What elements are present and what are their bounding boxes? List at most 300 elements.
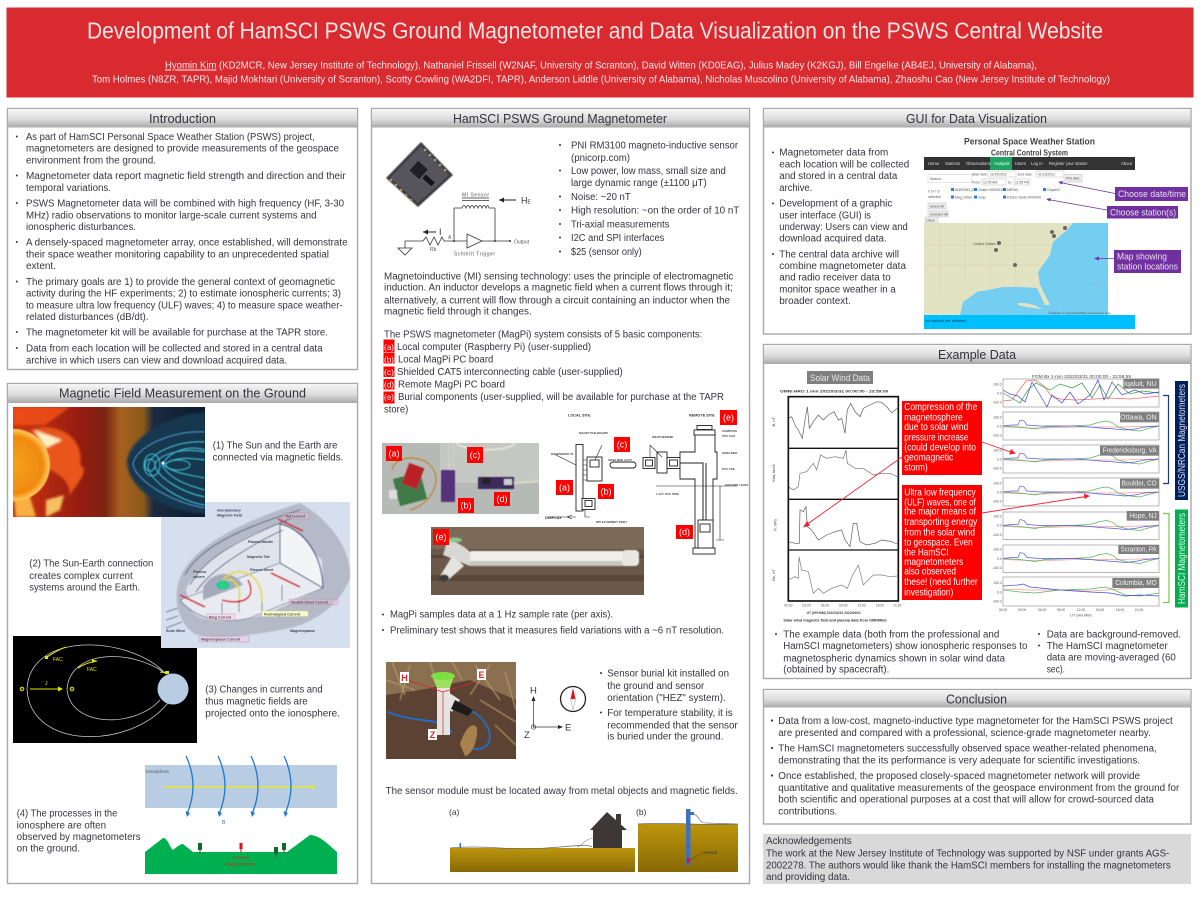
component list: (d) xyxy=(384,379,394,389)
status bar xyxy=(924,315,1135,329)
diagram: MI sensor circuit: Output xyxy=(514,240,530,246)
photo: sensor burial kit installed xyxy=(386,662,516,759)
caption 4 xyxy=(17,809,141,855)
image: magnetosphere current systems: Solar Wind xyxy=(166,629,185,633)
example data notes right: sec). xyxy=(1047,664,1065,675)
introduction bullets: activity during the HF experiments; 2) to estimate ionospheric currents; 3) xyxy=(26,289,341,300)
chart: magnetometer stacked plots: 12:00 xyxy=(1077,608,1085,612)
callout: choose stations xyxy=(1046,198,1178,218)
GUI bullets: broader context. xyxy=(779,296,851,307)
arrow: compression to station data xyxy=(982,442,1016,454)
station map: Sea xyxy=(1092,289,1100,293)
chart: magnetometer stacked plots: 100.0 xyxy=(993,382,1002,386)
image: magnetosphere current systems: Plasma- xyxy=(193,570,208,574)
GUI bullets: Magnetometer data from xyxy=(779,148,888,159)
callout: compression of the magnetosphere xyxy=(902,401,982,475)
GUI bullets: archive. xyxy=(779,183,812,194)
authors xyxy=(92,60,1110,86)
introduction bullets: Magnetometer data report magnetic field strength and direction and their xyxy=(26,171,346,182)
diagram: HEZ axes: Z xyxy=(524,730,530,741)
introduction bullets: PSWS Magnetometer data will be combined with high frequency (HF, 3-30 xyxy=(26,199,345,210)
photo: sensor burial kit installed: Z xyxy=(430,730,436,740)
GUI bullets xyxy=(772,148,909,307)
chart: solar wind data: Solar wind magnetic field and plasma data from OMNIWeb xyxy=(783,619,887,623)
photo: kit components: (a) xyxy=(388,448,400,458)
diagram: local and remote site wiring: DISPLAY xyxy=(545,515,562,520)
chart: magnetometer stacked plots: 03:00 xyxy=(1018,608,1026,612)
diagram: local and remote site wiring: RASPBERRY PI xyxy=(551,452,574,456)
introduction bullets: to measure ultra low frequency (ULF) waves; 4) to measure space weather- xyxy=(26,300,342,311)
example data notes left: The example data (both from the professional and xyxy=(783,629,999,640)
callout: choose date/time: Choose date/time xyxy=(1118,189,1186,200)
caption 3: (3) Changes in currents and xyxy=(205,685,323,696)
callout: map showing station locations: station locations xyxy=(1117,262,1178,272)
diagram: MI sensor circuit xyxy=(398,192,532,258)
introduction bullets: temporal variations. xyxy=(26,183,111,194)
heading: conclusion xyxy=(764,690,1190,708)
heading: GUI: GUI for Data Visualization xyxy=(906,111,1047,126)
image: magnetosphere current systems: Plasma Sheet xyxy=(250,568,274,572)
diagram: local and remote site wiring: (e) xyxy=(723,412,734,422)
navigation bar: Register your station xyxy=(1049,161,1088,166)
introduction bullets: The primary goals are 1) to provide the general context of geomagnetic xyxy=(26,277,335,288)
image: field-aligned currents: FAC xyxy=(53,657,63,663)
introduction bullets: related disturbances (dB/dt). xyxy=(26,312,148,323)
conclusion bullets: demonstrating that the its performance is very adequate for scientific investigations. xyxy=(778,755,1140,766)
callout: ultra low frequency waves: (ULF) waves, one of xyxy=(904,497,976,508)
search form: Grape02 xyxy=(1047,188,1060,192)
search form: Grape N0001916 xyxy=(978,188,1004,192)
callout: compression of the magnetosphere: geomagnetic xyxy=(904,452,953,463)
caption 3 xyxy=(205,685,340,720)
chart: magnetometer stacked plots: 06:00 xyxy=(1038,608,1046,612)
callout: ultra low frequency waves xyxy=(902,485,982,600)
component list: store) xyxy=(384,405,408,416)
heading: GUI xyxy=(764,109,1190,128)
chart: magnetometer stacked plots: 0.0 xyxy=(997,524,1002,528)
caption 4: on the ground. xyxy=(17,844,80,855)
chart: solar wind data: 21:00 xyxy=(893,604,902,608)
component list: (a) xyxy=(384,342,394,352)
diagram: MI sensor circuit: A xyxy=(448,235,452,241)
callout: ultra low frequency waves: transporting energy xyxy=(904,517,977,528)
sensor specification bullets: I2C and SPI interfaces xyxy=(571,233,664,244)
GUI bullets: underway: Users can view and xyxy=(779,222,908,233)
search form: check xyxy=(926,218,935,222)
acknowledgements xyxy=(763,834,1191,884)
callout: compression of the magnetosphere: magnetosphere xyxy=(904,412,963,423)
chart: magnetometer stacked plots: 21:00 xyxy=(1135,608,1143,612)
search form: Select All xyxy=(930,204,944,208)
station labels: Fredericksburg, VA xyxy=(1103,448,1157,455)
image: magnetosphere current systems: Interplanetary xyxy=(217,508,241,512)
title: Development of HamSCI PSWS Ground Magnetometer and Data Visualization on the PSWS Central Website xyxy=(87,18,1103,44)
station map: © Mapbox © OpenStreetMap Improve this map xyxy=(1048,311,1111,315)
search form: Plot data xyxy=(1066,176,1079,180)
example data notes right: The HamSCI magnetometer xyxy=(1047,641,1168,652)
sensor specification bullets: Noise: ~20 nT xyxy=(571,192,631,203)
chart: magnetometer stacked plots: 0.0 xyxy=(997,392,1002,396)
search form: From: xyxy=(972,180,981,184)
image: RM3100 sensor board xyxy=(386,142,453,207)
callout: ultra low frequency waves: the HamSCI xyxy=(904,547,949,558)
component list: The PSWS magnetometer (MagPi) system consists of 5 basic components: xyxy=(384,330,702,341)
callout: compression of the magnetosphere: Compression of the xyxy=(904,402,977,413)
photo: burial pipe xyxy=(431,527,644,595)
search form: Mag_kd5et xyxy=(955,196,972,200)
search form: K2SLE Node 0000043 xyxy=(1007,196,1041,200)
photo: burial pipe: (e) xyxy=(436,532,447,542)
search form: W3E0083_K xyxy=(955,188,975,192)
introduction bullets: A densely-spaced magnetometer array, once established, will demonstrate xyxy=(26,238,348,249)
diagram: placement (a): (a) xyxy=(449,807,460,817)
GUI bullets: The central data archive will xyxy=(779,249,899,260)
navigation bar: Log In xyxy=(1031,161,1043,166)
chart: magnetometer stacked plots: 100.0 xyxy=(993,481,1002,485)
chart: solar wind data: 00:00 xyxy=(784,604,793,608)
authors: Hyomin Kim (KD2MCR, New Jersey Institute of Technology), Nathaniel Frissell (W2NAF, University of Scranton), David Witten (KD0EAG), Julius Madey (K2KGJ), Bill Engelke (AB4EJ, University of Alabama), xyxy=(165,60,1037,72)
image: ionosphere and ground magnetometer: J xyxy=(240,781,243,787)
chart: magnetometer stacked plots: FGM Bx 1-min 2022/03/31 00:00:00 - 23:59:59 xyxy=(1032,374,1131,379)
diagram: local and remote site wiring: SHIELDED xyxy=(722,451,738,455)
component list xyxy=(384,330,724,416)
example data notes left xyxy=(775,629,1027,676)
photo: kit components: (c) xyxy=(470,450,480,460)
search form: to: xyxy=(1008,180,1012,184)
panel: example data xyxy=(764,344,1191,678)
caption 3: thus magnetic fields are xyxy=(205,697,308,708)
image: ionosphere and ground magnetometer: B xyxy=(222,820,226,826)
photo: sensor burial kit installed: H xyxy=(401,673,408,683)
chart: magnetometer stacked plots: 0.0 xyxy=(997,590,1002,594)
caption 2 xyxy=(29,559,153,594)
MagPi performance bullets xyxy=(382,610,724,636)
sensor burial bullets: is buried under the ground. xyxy=(607,731,723,742)
search form: End date: xyxy=(1018,172,1033,176)
diagram: placement (b): Sensor xyxy=(703,850,718,855)
GUI bullets: and stored in a central data xyxy=(779,171,898,182)
chart: solar wind data: Vsw, km/s xyxy=(771,464,776,482)
callout: compression of the magnetosphere: pressure increase xyxy=(904,432,968,443)
GUI bullets: combine magnetometer data xyxy=(779,261,907,272)
diagram: local and remote site wiring: REMOTE SITE xyxy=(689,414,715,418)
sensor specification bullets: Tri-axial measurements xyxy=(571,219,669,230)
search form: Search... xyxy=(930,177,944,181)
callout: compression of the magnetosphere: storm) xyxy=(904,462,928,473)
caption 1: connected via magnetic fields. xyxy=(213,453,343,464)
callout: ultra low frequency waves: also observed xyxy=(904,566,956,577)
photo: kit components: (d) xyxy=(496,494,508,504)
image: field-aligned currents: J xyxy=(45,681,48,687)
sensor specification bullets: (pnicorp.com) xyxy=(571,153,630,164)
panel: magnetic field measurement xyxy=(0,384,358,884)
caption 2: creates complex current xyxy=(29,571,133,582)
chart: magnetometer stacked plots: UT (HH:MM) xyxy=(1070,614,1092,618)
heading: conclusion: Conclusion xyxy=(946,692,1007,706)
heading: introduction xyxy=(8,109,357,128)
caption 1 xyxy=(213,440,343,464)
heading: introduction: Introduction xyxy=(149,111,216,126)
diagram: HEZ axes: H xyxy=(530,686,537,696)
chart: solar wind data: 09:00 xyxy=(839,604,848,608)
acknowledgements: 2002278. The authors would like thank the HamSCI members for installing the magnetometers xyxy=(766,860,1171,871)
chart: magnetometer stacked plots: -100.0 xyxy=(992,600,1002,604)
introduction bullets: their space weather monitoring capability to an unprecedented spatial xyxy=(26,249,329,260)
image: field-aligned currents: FAC xyxy=(87,667,97,673)
screenshot: PSWS central control system: Central Control System xyxy=(991,148,1068,158)
acknowledgements: The work at the New Jersey Institute of Technology was supported by NSF under grants AGS- xyxy=(766,849,1169,860)
example data notes left: magnetospheric dynamics shown in solar wind data xyxy=(783,653,1006,664)
diagram: placement (b) xyxy=(636,807,738,872)
panel: GUI for data visualization xyxy=(763,108,1191,884)
chart: magnetometer stacked plots: 15:00 xyxy=(1096,608,1104,612)
diagram: MI sensor circuit: I xyxy=(439,227,442,237)
station map: United States xyxy=(973,242,996,246)
conclusion bullets: both scientific and operational purposes at a cost that will allow for crowd-sourced data xyxy=(778,795,1155,806)
acknowledgements: Acknowledgements xyxy=(766,836,852,847)
diagram: local and remote site wiring xyxy=(545,410,749,554)
arrow: ULF to station data xyxy=(982,494,1090,513)
navigation bar: Home xyxy=(928,161,940,166)
chart: magnetometer stacked plots: -100.0 xyxy=(992,401,1002,405)
diagram: MI sensor circuit: Rb xyxy=(430,247,437,253)
chart: magnetometer stacked plots: 100.0 xyxy=(993,515,1002,519)
diagram: local and remote site wiring: GROUND LEVEL xyxy=(725,483,749,487)
conclusion bullets: are presented and compared with a professional, science-grade magnetometer nearby. xyxy=(778,728,1151,739)
example data notes left: (obtained by spacecraft). xyxy=(783,665,889,676)
conclusion bullets: Data from a low-cost, magneto-inductive type magnetometer for the HamSCI PSWS project xyxy=(778,716,1173,727)
diagram: local and remote site wiring: COMPASS xyxy=(722,429,737,433)
callout: ultra low frequency waves: to geospace. Even xyxy=(904,537,973,548)
GUI bullets: download acquired data. xyxy=(779,234,887,245)
image: field-aligned currents xyxy=(13,636,197,743)
callout: compression of the magnetosphere: (could develop into xyxy=(904,442,976,453)
chart: magnetometer stacked plots: -100.0 xyxy=(992,434,1002,438)
legend: USGS/NRCan magnetometers xyxy=(1163,381,1188,500)
magnetoinductive description: induction. An inductor develops a magnetic field when a current flows through it; xyxy=(384,283,733,294)
station labels: Boulder, CO xyxy=(1122,481,1157,488)
chart: magnetometer stacked plots: 100.0 xyxy=(993,415,1002,419)
chart: magnetometer stacked plots: -100.0 xyxy=(992,467,1002,471)
component list: Local computer (Raspberry Pi) (user-supplied) xyxy=(397,342,591,353)
chart: magnetometer stacked plots: 100.0 xyxy=(993,448,1002,452)
diagram: local and remote site wiring: 1-1/2" PVC PIPE xyxy=(656,492,679,496)
navigation bar: About xyxy=(1121,161,1133,166)
image: ionosphere and ground magnetometer: Magnetometer xyxy=(225,862,256,868)
introduction bullets: As part of HamSCI Personal Space Weather Station (PSWS) project, xyxy=(26,132,315,143)
navigation bar: Observations xyxy=(966,161,991,166)
chart: solar wind data xyxy=(771,390,902,623)
arrow: compression to solar wind pressure xyxy=(803,457,902,528)
chart: magnetometer stacked plots: 09:00 xyxy=(1057,608,1065,612)
legend: USGS/NRCan magnetometers: USGS/NRCan Magnetometers xyxy=(1176,384,1188,497)
panel: introduction xyxy=(8,108,358,370)
chart: magnetometer stacked plots: 0.0 xyxy=(997,491,1002,495)
chart: magnetometer stacked plots: 0.0 xyxy=(997,458,1002,462)
component list: Remote MagPi PC board xyxy=(398,379,505,390)
caption 2: systems around the Earth. xyxy=(29,583,140,594)
GUI bullets: each location will be collected xyxy=(779,159,909,170)
caption 2: (2) The Sun-Earth connection xyxy=(29,559,153,570)
image: magnetosphere current systems: Field-aligned Current xyxy=(264,612,301,616)
diagram: HEZ axes: E xyxy=(565,722,571,734)
sensor burial bullets: the ground and sensor xyxy=(607,681,705,692)
diagram: placement (b): (b) xyxy=(636,807,647,817)
image: ionosphere and ground magnetometer xyxy=(145,756,337,874)
conclusion bullets: quantitative and qualitative measurements of the geospace environment from the ground for xyxy=(778,783,1180,794)
image: magnetosphere current systems: Magnetic Tail xyxy=(247,555,270,559)
diagram: local and remote site wiring: (c) xyxy=(617,440,627,450)
navigation bar: Users xyxy=(1015,161,1026,166)
image: magnetosphere current systems xyxy=(161,502,350,648)
search form xyxy=(925,171,1082,223)
heading: ground magnetometer xyxy=(372,109,749,128)
chart: solar wind data: B, nT xyxy=(771,416,776,426)
introduction bullets: magnetometers are designed to provide measurements of the geospace xyxy=(26,144,339,155)
chart: solar wind data: 18:00 xyxy=(876,604,884,608)
station labels xyxy=(1100,379,1159,588)
panel: hamsci psws ground magnetometer xyxy=(372,108,750,884)
callout: ultra low frequency waves: from the solar wind xyxy=(904,527,975,538)
introduction bullets: MHz) radio observations to monitor large-scale current systems and xyxy=(26,210,316,221)
label: solar wind data: Solar Wind Data xyxy=(810,373,871,384)
chart: magnetometer stacked plots: 100.0 xyxy=(993,581,1002,585)
image: magnetosphere current systems: Ring Current xyxy=(209,616,232,620)
image: magnetosphere current systems: Magnetopause Current xyxy=(201,638,241,642)
chart: solar wind data: OMNI HRO 1 min 2022/03/31 00:00:00 - 23:59:00 xyxy=(780,390,888,394)
callout: ultra low frequency waves: Ultra low frequency xyxy=(904,487,976,498)
callout: ultra low frequency waves: these! (need further xyxy=(904,577,978,588)
conclusion bullets xyxy=(771,716,1180,817)
callout: choose date/time xyxy=(1058,181,1188,201)
chart: solar wind data: P, nPa xyxy=(773,518,778,531)
GUI bullets: user interface (GUI) is xyxy=(779,210,871,221)
introduction bullets: Data from each location will be collected and stored in a central data xyxy=(26,343,323,354)
component list: (c) xyxy=(384,367,394,377)
image: magnetosphere current systems: sphere xyxy=(193,575,205,579)
chart: magnetometer stacked plots: 100.0 xyxy=(993,548,1002,552)
chart: magnetometer stacked plots: -100.0 xyxy=(992,500,1002,504)
magnetoinductive description xyxy=(384,271,733,317)
station labels: Scranton, PA xyxy=(1121,547,1157,554)
MagPi performance bullets: Preliminary test shows that it measures field variations with a ~6 nT resolution. xyxy=(390,625,724,636)
caption 3: projected onto the ionosphere. xyxy=(205,709,340,720)
chart: magnetometer stacked plots: 0.0 xyxy=(997,425,1002,429)
diagram: local and remote site wiring: SHIELDED CAT5 xyxy=(608,458,632,462)
diagram: local and remote site wiring: RPI ETHERNET PORT xyxy=(596,520,627,524)
navigation bar: Analysis xyxy=(994,161,1010,166)
sensor specification bullets: large dynamic range (±1100 μT) xyxy=(571,178,707,189)
sensor specification bullets: PNI RM3100 magneto-inductive sensor xyxy=(571,140,739,151)
magnetoinductive description: alternatively, a current will flow through a circuit containing an inductor when the xyxy=(384,295,730,306)
callout: ultra low frequency waves: the major means of xyxy=(904,507,976,518)
navigation bar xyxy=(924,157,1135,170)
example data notes right: Data are background-removed. xyxy=(1047,629,1181,640)
introduction bullets xyxy=(16,132,348,366)
search form: 12:00 AM xyxy=(983,180,998,184)
diagram: local and remote site wiring: (a) xyxy=(559,482,570,492)
chart: solar wind data: 12:00 xyxy=(857,604,866,608)
GUI bullets: and radio receiver data to xyxy=(779,273,891,284)
station labels: Iqaluit, NU xyxy=(1124,381,1157,388)
sensor specification bullets: $25 (sensor only) xyxy=(571,247,642,258)
authors: Tom Holmes (N8ZR, TAPR), Majid Mokhtari (University of Scranton), Scotty Cowling (WA2DFI, TAPR), Anderson Liddle (University of Alabama), Nicholas Muscolino (University of Alabama), Zhaoshu Cao (New Jersey Institute of Technology) xyxy=(92,74,1110,86)
screenshot: PSWS central control system xyxy=(924,136,1135,329)
example data notes right xyxy=(1038,629,1181,675)
search form: 0 of 7 S xyxy=(928,190,940,194)
example data notes right: data are moving-averaged (60 xyxy=(1047,653,1176,664)
station labels: Ottawa, ON xyxy=(1120,414,1157,421)
diagram: MI sensor circuit: MI Sensor xyxy=(462,192,489,198)
diagram: local and remote site wiring: (d) xyxy=(679,527,690,537)
diagram: MI sensor circuit: Schmitt Trigger xyxy=(454,252,495,258)
caption 4: ionosphere are often xyxy=(17,820,106,831)
sensor placement note: The sensor module must be located away from metal objects and magnetic fields. xyxy=(386,786,738,797)
photo: sensor burial kit installed: E xyxy=(478,670,485,680)
station labels: Hope, NJ xyxy=(1129,513,1157,520)
image: magnetosphere current systems: Plasma Mantle xyxy=(248,540,273,544)
header banner xyxy=(6,8,1194,98)
introduction bullets: The magnetometer kit will be available for purchase at the TAPR store. xyxy=(26,328,328,339)
chart: magnetometer stacked plots xyxy=(992,374,1159,618)
image: magnetosphere current systems: Neutral Sheet Current xyxy=(291,600,329,604)
search form: 11/14/2022 xyxy=(990,172,1007,176)
status bar: No stations are selected. xyxy=(925,319,967,323)
sensor specification bullets: Low power, low mass, small size and xyxy=(571,166,726,177)
diagram: local and remote site wiring: MAGPI PCB BOARD xyxy=(579,431,609,435)
sensor specification bullets xyxy=(559,140,739,258)
caption 4: observed by magnetometers xyxy=(17,832,141,843)
diagram: local and remote site wiring: (b) xyxy=(600,486,612,496)
screenshot: PSWS central control system: Personal Space Weather Station xyxy=(964,136,1095,148)
chart: magnetometer stacked plots: 0.0 xyxy=(997,557,1002,561)
sensor specification bullets: High resolution: ~on the order of 10 nT xyxy=(571,205,739,216)
panel: conclusion xyxy=(764,690,1191,824)
introduction bullets: ionospheric disturbances. xyxy=(26,222,136,233)
trace: Iqaluit xyxy=(1003,380,1159,407)
diagram: local and remote site wiring: PVC TEE xyxy=(722,467,735,471)
example data notes left: HamSCI magnetometers) show ionospheric responses to xyxy=(783,641,1027,652)
chart: magnetometer stacked plots: -100.0 xyxy=(992,566,1002,570)
conclusion bullets: contributions. xyxy=(778,806,837,817)
heading: example data: Example Data xyxy=(938,347,1017,362)
station map: Sargasso xyxy=(1089,283,1105,287)
introduction bullets: extent. xyxy=(26,261,56,272)
image: magnetosphere current systems: Magnetopause xyxy=(290,629,315,633)
component list: Shielded CAT5 interconnecting cable (user-supplied) xyxy=(397,367,623,378)
introduction bullets: archive in which users can view and download acquired data. xyxy=(26,355,287,366)
image: sun and earth magnetic fields xyxy=(0,407,205,517)
chart: magnetometer stacked plots: -100.0 xyxy=(992,533,1002,537)
magnetoinductive description: magnetic field through it changes. xyxy=(384,306,532,317)
acknowledgements: and providing data. xyxy=(766,872,850,883)
conclusion bullets: Once established, the proposed closely-spaced magnetometer network will provide xyxy=(778,771,1140,782)
station map xyxy=(924,223,1111,315)
magnetoinductive description: Magnetoinductive (MI) sensing technology: uses the principle of electromagnetic xyxy=(384,271,733,282)
sensor burial bullets xyxy=(600,669,738,742)
image: ionosphere and ground magnetometer: Ground xyxy=(232,855,249,861)
component list: Burial components (user-supplied, will be available for purchase at the TAPR xyxy=(398,392,724,403)
chart: magnetometer stacked plots: 00:00 xyxy=(999,608,1007,612)
diagram: HEZ axes xyxy=(524,686,571,741)
conclusion bullets: The HamSCI magnetometers successfully observed space weather-related phenomena, xyxy=(778,743,1157,754)
chart: solar wind data: 03:00 xyxy=(802,604,811,608)
search form: 11:59 PM xyxy=(1015,180,1029,184)
diagram: local and remote site wiring: LOCAL SITE xyxy=(568,414,591,418)
chart: solar wind data: Bz, nT xyxy=(771,569,776,581)
chart: magnetometer stacked plots: 18:00 xyxy=(1116,608,1124,612)
diagram: MI sensor circuit: HE xyxy=(521,196,532,206)
